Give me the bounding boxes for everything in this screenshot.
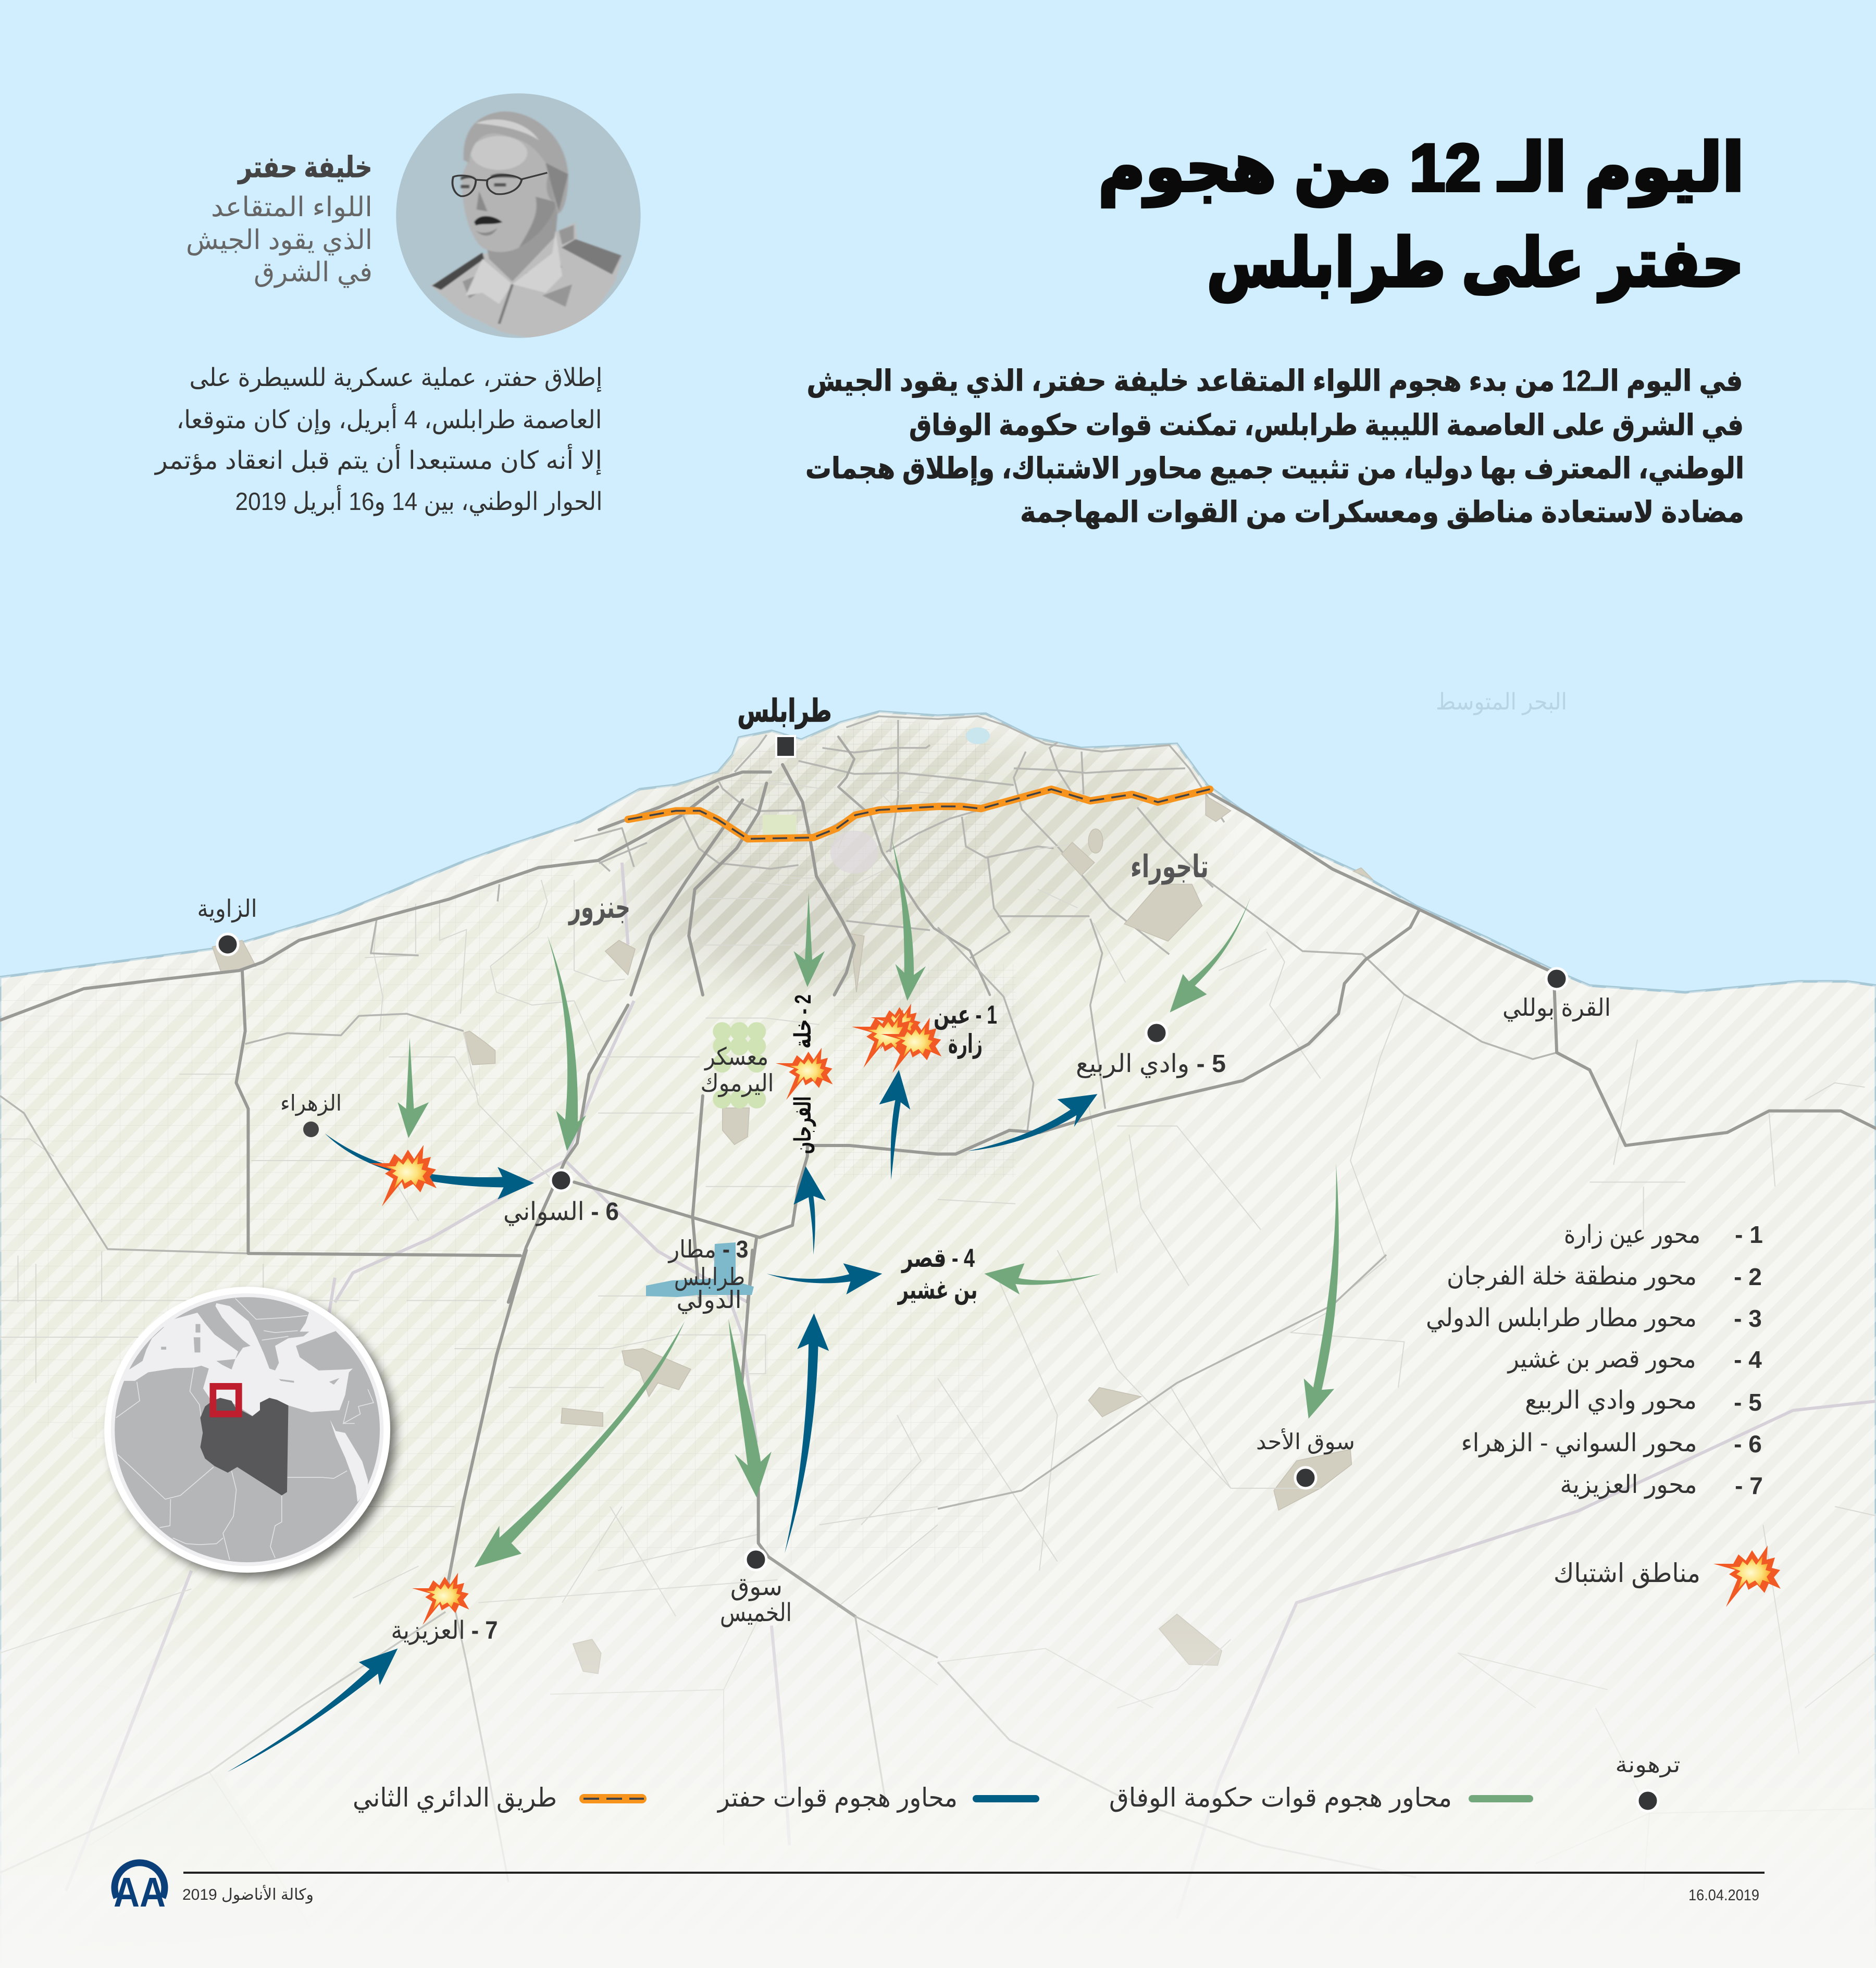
portrait caption xyxy=(186,151,372,288)
legend: second ring road: طريق الدائري الثاني xyxy=(353,1783,557,1813)
intro paragraph: مضادة لاستعادة مناطق ومعسكرات من القوات المهاجمة xyxy=(1020,495,1744,529)
city marker: Wadi Rabi xyxy=(1146,1023,1167,1043)
arrow: blue Zahra to Sawani xyxy=(325,1134,534,1200)
axis 7: محور العزيزية xyxy=(1560,1471,1697,1499)
label: Zawiya: الزاوية xyxy=(197,895,257,923)
arrow: green to Ain Zara xyxy=(891,837,926,1001)
axis 5: محور وادي الربيع xyxy=(1525,1387,1697,1415)
label: Ain Zara xyxy=(934,1000,997,1059)
arrow: blue to Farjan xyxy=(793,1166,826,1255)
roads and blocks: western north map xyxy=(0,787,938,1302)
axis 6: محور السواني - الزهراء xyxy=(1461,1429,1697,1458)
arrow: green to Farjan xyxy=(793,893,825,987)
second ring road xyxy=(628,789,1210,839)
arrow: blue airport to Qasr xyxy=(767,1263,882,1294)
axis 3: محور مطار طرابلس الدولي xyxy=(1426,1304,1697,1332)
yarmouk camp irrigation circles xyxy=(713,1022,766,1108)
legend: Haftar forces axes: محاور هجوم قوات حفتر xyxy=(716,1783,958,1813)
label: Qasr bin Ghashir xyxy=(897,1243,977,1305)
footer: agency credit: وكالة الأناضول 2019 xyxy=(182,1884,314,1904)
portrait of Haftar xyxy=(396,93,641,341)
label: Qasr bin Ghashir: بن غشير xyxy=(897,1275,977,1305)
arrow: blue to Wadi Rabi xyxy=(967,1094,1098,1151)
roads and blocks: eastern south map xyxy=(938,1250,1875,1919)
axis 6: - 6 xyxy=(1734,1430,1762,1458)
role: في الشرق xyxy=(254,257,372,288)
label: Wadi Rabi: 5 - وادي الربيع xyxy=(1076,1050,1226,1078)
label: Zahra: الزهراء xyxy=(280,1091,342,1116)
arrows northern west xyxy=(325,837,926,1294)
title xyxy=(1098,131,1744,302)
label: Qasr bin Ghashir: 4 - قصر xyxy=(901,1243,975,1274)
legend: clash zones: مناطق اشتباك xyxy=(1554,1559,1700,1588)
label: airport: الدولي xyxy=(676,1286,742,1314)
clash: Aziziya xyxy=(412,1573,469,1625)
axis 2: محور منطقة خلة الفرجان xyxy=(1447,1263,1697,1291)
label: Yarmouk camp: اليرموك xyxy=(700,1069,774,1098)
side paragraph: إلا أنه كان مستبعدا أن يتم قبل انعقاد مؤتمر xyxy=(154,444,602,475)
label: Mediterranean: البحر المتوسط xyxy=(1436,689,1567,715)
label: Aziziya: 7 - العزيزية xyxy=(391,1617,498,1645)
land base map xyxy=(0,712,1876,1968)
clash: Ain Zara west xyxy=(852,1010,915,1068)
label: Souq Khamis xyxy=(720,1573,792,1627)
side paragraph: الحوار الوطني، بين 14 و16 أبريل 2019 xyxy=(235,485,603,516)
map labels xyxy=(197,689,1681,1777)
footer rule xyxy=(183,1872,1765,1874)
footer: date: 16.04.2019 xyxy=(1688,1887,1759,1904)
label: Yarmouk camp: معسكر xyxy=(704,1043,768,1071)
label: Khallat Farjan xyxy=(790,994,816,1154)
axis 2: - 2 xyxy=(1734,1263,1762,1290)
clash: Ain Zara top xyxy=(871,1004,921,1050)
legend: clash zones xyxy=(1554,1546,1781,1607)
label: Khallat Farjan: الفرجان xyxy=(790,1096,816,1154)
intro paragraph: الوطني، المعترف بها دوليا، من تثبيت جميع محاور الاشتباك، وإطلاق هجمات xyxy=(805,452,1744,485)
label: Souq Khamis: سوق xyxy=(730,1573,782,1601)
city marker: Sawani xyxy=(551,1170,572,1191)
axis 5: - 5 xyxy=(1734,1389,1762,1416)
roads and blocks: eastern north map xyxy=(938,791,1875,1299)
side paragraph xyxy=(154,364,602,516)
city marker: Tripoli xyxy=(776,736,795,757)
city marker: Zawiya xyxy=(217,934,238,955)
arrow: blue to Ain Zara xyxy=(879,1070,910,1180)
clash: Zahra xyxy=(369,1145,437,1206)
axis list legend xyxy=(1426,1221,1763,1499)
label: Sawani: 6 - السواني xyxy=(503,1198,619,1226)
city marker: Zahra xyxy=(303,1122,319,1137)
label: Qarabulli: القرة بوللي xyxy=(1502,994,1611,1022)
axis 1: محور عين زارة xyxy=(1564,1221,1700,1249)
arrows southern xyxy=(227,1313,829,1772)
intro paragraph xyxy=(805,364,1744,529)
clash: Ain Zara east xyxy=(881,1018,941,1073)
axis 1: - 1 xyxy=(1735,1221,1763,1248)
airport runway xyxy=(646,1242,754,1297)
arrow: green to Qasr xyxy=(985,1263,1101,1294)
axis 4: - 4 xyxy=(1734,1346,1762,1373)
label: Yarmouk camp xyxy=(700,1043,774,1098)
label: Tajoura: تاجوراء xyxy=(1130,849,1209,885)
side paragraph: إطلاق حفتر، عملية عسكرية للسيطرة على xyxy=(190,364,602,392)
label: airport: طرابلس xyxy=(674,1263,745,1291)
arrow: green to Sawani xyxy=(547,935,586,1151)
legend: government forces axes: محاور هجوم قوات حكومة الوفاق xyxy=(1109,1783,1452,1813)
role: اللواء المتقاعد xyxy=(211,192,372,223)
arrow: blue north from Souq Khamis xyxy=(785,1313,829,1553)
role: الذي يقود الجيش xyxy=(186,225,372,256)
label: airport: 3 - مطار xyxy=(668,1236,748,1263)
Tripoli road network xyxy=(599,716,1224,995)
label: Janzour: جنزور xyxy=(568,890,630,926)
intro paragraph: في الشرق على العاصمة الليبية طرابلس، تمكنت قوات حكومة الوفاق xyxy=(909,408,1744,442)
label: Ain Zara: زارة xyxy=(948,1029,983,1059)
roads and blocks: western south map xyxy=(0,1250,938,1928)
city marker: Tarhuna xyxy=(1637,1790,1658,1811)
axis 7: - 7 xyxy=(1735,1472,1763,1499)
arrow: green to Souq Khamis xyxy=(728,1319,772,1498)
arrow: green to Aziziya xyxy=(474,1321,685,1567)
city marker: Souq Ahad xyxy=(1295,1467,1316,1488)
logo: Anadolu Agency: AA xyxy=(114,1869,166,1915)
arrow: green to Wadi Rabi xyxy=(1170,897,1250,1013)
label: Ain Zara: 1 - عين xyxy=(934,1000,997,1030)
label: Tarhuna: ترهونة xyxy=(1615,1752,1681,1777)
axis 7 xyxy=(1560,1471,1763,1499)
label: Tripoli: طرابلس xyxy=(738,693,831,729)
locator globe inset xyxy=(104,1287,395,1578)
axis 4: محور قصر بن غشير xyxy=(1507,1346,1696,1374)
hide fading southern map xyxy=(0,1537,1876,1968)
label: Souq Khamis: الخميس xyxy=(720,1599,792,1627)
city marker: Qarabulli xyxy=(1546,968,1567,989)
intro paragraph: في اليوم الـ12 من بدء هجوم اللواء المتقاعد خليفة حفتر، الذي يقود الجيش xyxy=(806,364,1743,398)
arrow: green to Zahra clash xyxy=(397,1038,429,1138)
name: خليفة حفتر xyxy=(237,151,372,184)
arrow: blue to Aziziya xyxy=(227,1649,397,1772)
arrow: green to Souq Ahad xyxy=(1304,1164,1339,1418)
title: حفتر على طرابلس xyxy=(1207,226,1744,302)
city marker: Souq Khamis xyxy=(746,1549,766,1570)
label: Khallat Farjan: 2 - خلة xyxy=(790,994,816,1049)
role xyxy=(186,192,372,288)
title: اليوم الـ 12 من هجوم xyxy=(1098,131,1744,207)
arrows northern east xyxy=(967,897,1250,1294)
axis 5 xyxy=(1525,1387,1762,1416)
axis 3: - 3 xyxy=(1734,1305,1762,1332)
side paragraph: العاصمة طرابلس، 4 أبريل، وإن كان متوقعا، xyxy=(176,403,602,434)
label: airport xyxy=(668,1236,748,1314)
clash: Farjan xyxy=(776,1048,833,1100)
label: Souq Ahad: سوق الأحد xyxy=(1256,1428,1355,1454)
